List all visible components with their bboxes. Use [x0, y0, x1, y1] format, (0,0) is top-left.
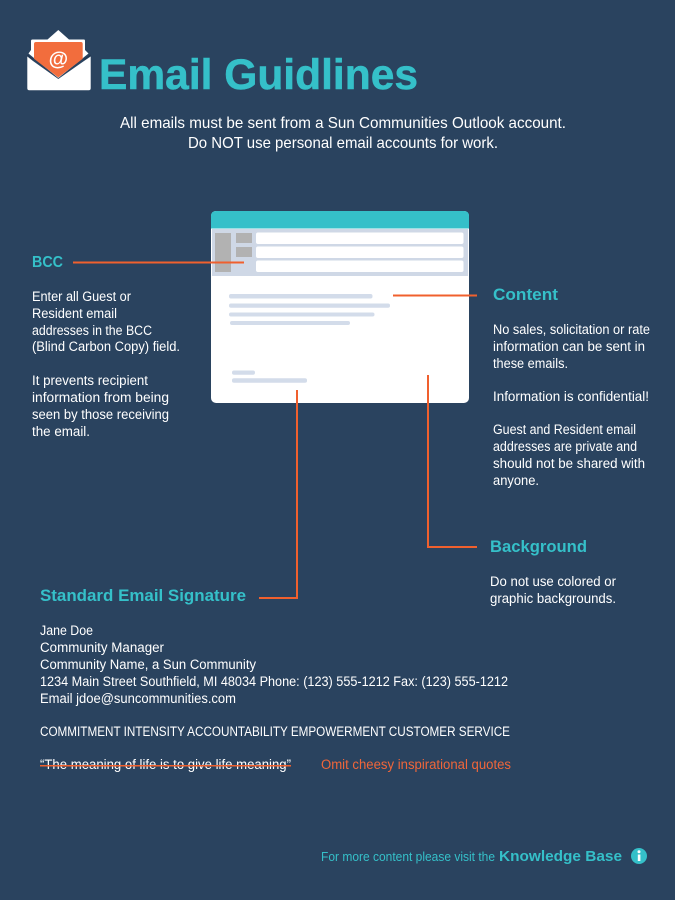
- text block: BCC: the email.: [32, 424, 90, 439]
- text block: Content: should not be shared with: [493, 456, 645, 471]
- struck-through quote: “The meaning of life is to give life meaning”: [40, 757, 291, 772]
- text block: Content: these emails.: [493, 356, 568, 371]
- text block: Content: addresses are private and: [493, 439, 637, 454]
- text block: BCC: It prevents recipient: [32, 373, 148, 388]
- heading: BCC: BCC: [32, 254, 63, 271]
- title: Email Guidlines: [99, 51, 418, 99]
- text block: signature example: Jane Doe: [40, 623, 93, 638]
- text block: BCC: [32, 289, 180, 439]
- intro text: All emails must be sent from a Sun Communities Outlook account.: [120, 115, 566, 132]
- text block: BCC: Enter all Guest or: [32, 289, 131, 304]
- text block: Content: anyone.: [493, 473, 539, 488]
- footer text: For more content please visit the: [321, 849, 495, 864]
- text block: BCC: seen by those receiving: [32, 407, 169, 422]
- text block: signature example: 1234 Main Street Southfield, MI 48034 Phone: (123) 555-1212 Fax: (123) 555-1212: [40, 674, 508, 689]
- text block: signature example: COMMITMENT INTENSITY ACCOUNTABILITY EMPOWERMENT CUSTOMER SERVICE: [40, 724, 510, 739]
- text block: signature example: Community Name, a Sun Community: [40, 657, 256, 672]
- text block: signature example: [40, 623, 510, 739]
- text block: Background: graphic backgrounds.: [490, 591, 616, 606]
- heading: Standard Email Signature: Standard Email Signature: [40, 586, 246, 605]
- callout: omit quotes: Omit cheesy inspirational quotes: [321, 757, 511, 772]
- text block: Content: No sales, solicitation or rate: [493, 322, 650, 337]
- text block: BCC: information from being: [32, 390, 169, 405]
- text block: Content: [493, 322, 650, 488]
- text block: signature example: Community Manager: [40, 640, 164, 655]
- footer text: Knowledge Base: [499, 848, 622, 865]
- icon: envelope with at sign: [27, 30, 91, 90]
- footer text: [321, 848, 622, 865]
- text block: Background: [490, 574, 616, 606]
- intro text: Do NOT use personal email accounts for work.: [188, 135, 498, 152]
- icon: info: [631, 848, 647, 864]
- text block: Background: Do not use colored or: [490, 574, 616, 589]
- text block: Content: Guest and Resident email: [493, 422, 636, 437]
- email header fields: [212, 229, 468, 276]
- arrow: Background connector: [428, 375, 477, 547]
- text block: BCC: addresses in the BCC: [32, 323, 152, 338]
- arrow: Signature connector: [259, 390, 297, 598]
- intro text: [120, 115, 566, 152]
- panel: email window mockup: [211, 211, 469, 403]
- text block: Content: information can be sent in: [493, 339, 645, 354]
- email signature lines: [232, 370, 307, 383]
- arrow: Content connector: [393, 294, 477, 296]
- icon: envelope with at sign: @: [49, 48, 68, 70]
- window title bar: [211, 211, 469, 228]
- email body lines: [229, 294, 390, 325]
- arrow: BCC connector: [73, 262, 244, 264]
- heading: Background: Background: [490, 537, 587, 556]
- text block: Content: Information is confidential!: [493, 389, 649, 404]
- text block: BCC: Resident email: [32, 306, 117, 321]
- text block: signature example: Email jdoe@suncommunities.com: [40, 691, 236, 706]
- heading: Content: Content: [493, 285, 558, 304]
- text block: BCC: (Blind Carbon Copy) field.: [32, 339, 180, 354]
